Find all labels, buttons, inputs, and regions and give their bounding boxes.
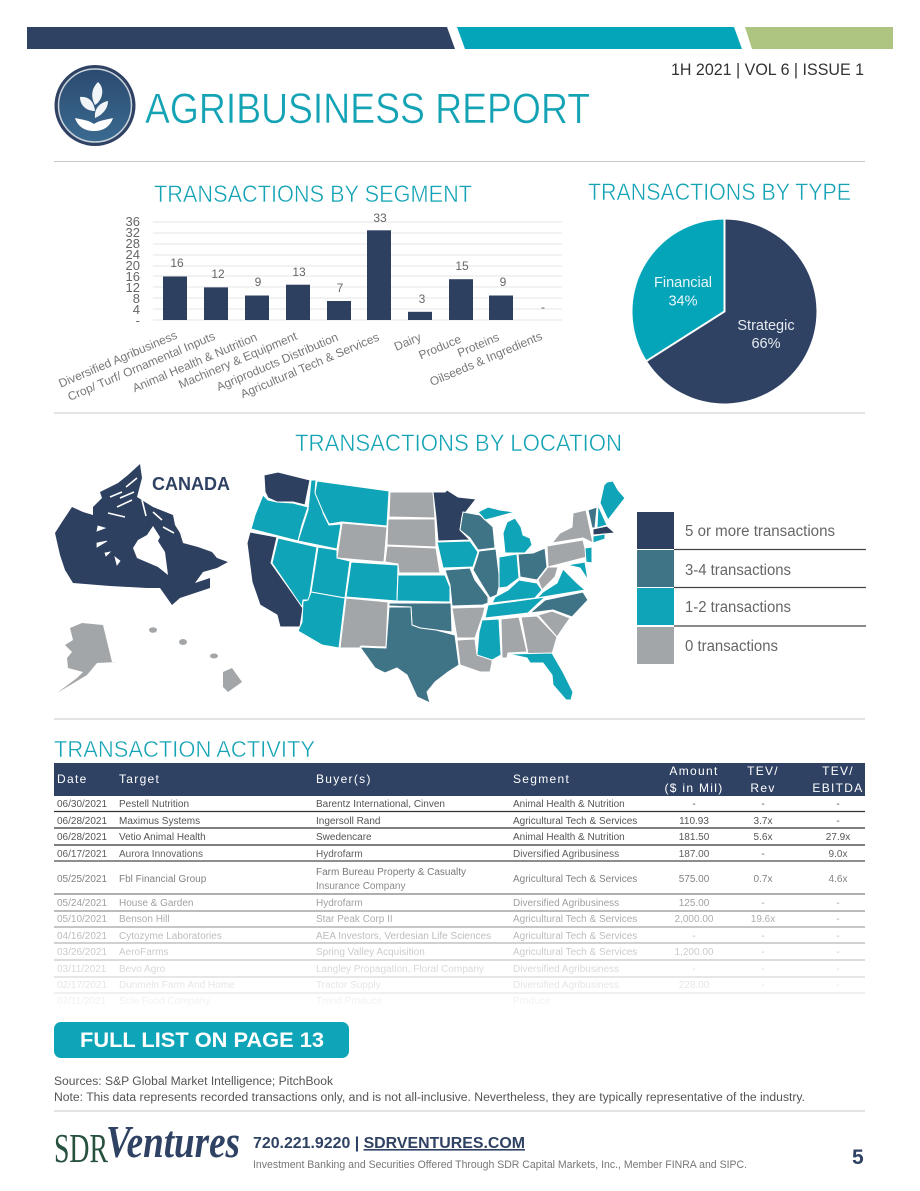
y axis labels: 24 (126, 247, 140, 262)
contact details (253, 1135, 747, 1171)
sources and note: Note: This data represents recorded transactions only, and is not all-inclusive. Nevertheless, they are typically representative of the industry. (54, 1092, 805, 1104)
contact details: Investment Banking and Securities Offered Through SDR Capital Markets, Inc., Member FINRA and SIPC. (253, 1159, 747, 1171)
table rows: 187.00 (679, 849, 710, 860)
table rows: Diversified Agribusiness (513, 964, 619, 975)
map: Alaska and Hawaii (57, 623, 242, 693)
category labels: Animal Health & Nutrition (130, 330, 259, 395)
table rows: Agricultural Tech & Services (513, 931, 637, 942)
bar value labels: 3 (419, 292, 426, 306)
table rows: - (692, 964, 696, 975)
table rows: 125.00 (679, 898, 710, 909)
table rows: 228.00 (679, 980, 710, 991)
table rows: Hydrofarm (316, 898, 363, 909)
category labels: Agriproducts Distribution (214, 330, 340, 394)
page number: 5 (852, 1146, 864, 1169)
table rows: Star Peak Corp II (316, 914, 393, 925)
bar value labels: 9 (500, 275, 507, 289)
table rows: Trend Produce (316, 996, 382, 1007)
bar value labels: - (541, 300, 545, 314)
table rows: 06/30/2021 (57, 799, 107, 810)
table rows: 06/28/2021 (57, 832, 107, 843)
table rows: - (761, 931, 765, 942)
table rows: 575.00 (679, 874, 710, 885)
SDR Ventures logo: Ventures (106, 1116, 240, 1167)
pie chart: transactions by type (632, 220, 816, 404)
table rows: 3.7x (754, 816, 772, 827)
table rows: Sole Food Company (119, 996, 210, 1007)
table rows: House & Garden (119, 898, 194, 909)
table rows: 06/17/2021 (57, 849, 107, 860)
table rows: - (692, 799, 696, 810)
table header: TEV/ (747, 764, 779, 778)
bar value labels: 13 (292, 265, 306, 279)
category labels: Proteins (455, 330, 501, 360)
table rows: Dunmeln Farm And Home (119, 980, 235, 991)
bar value labels: 15 (455, 259, 469, 273)
sources and note: Sources: S&P Global Market Intelligence; PitchBook (54, 1076, 333, 1088)
table rows: 4.6x (829, 874, 847, 885)
y axis labels: 8 (133, 291, 140, 306)
table rows: 110.93 (679, 816, 709, 827)
table header: Target (119, 772, 160, 786)
bars (163, 230, 513, 320)
pie label: financial: 34% (668, 294, 698, 310)
table rows: - (836, 914, 840, 925)
table rows: 05/25/2021 (57, 874, 107, 885)
table rows: - (761, 964, 765, 975)
y axis labels: 4 (133, 302, 140, 317)
map legend (637, 512, 866, 664)
table rows: Animal Health & Nutrition (513, 832, 625, 843)
table rows: 9.0x (829, 849, 847, 860)
bar value labels (170, 211, 545, 314)
pie label: strategic: Strategic (737, 318, 795, 334)
heading: transactions by type: TRANSACTIONS BY TYPE (588, 179, 851, 206)
table rows: Spring Valley Acquisition (316, 947, 425, 958)
legend labels (685, 523, 835, 655)
table rows: Benson Hill (119, 914, 170, 925)
heading: transactions by segment: TRANSACTIONS BY SEGMENT (154, 181, 472, 208)
y axis labels: - (136, 313, 140, 328)
y axis labels: 36 (126, 214, 140, 229)
table rows: Animal Health & Nutrition (513, 799, 625, 810)
table rows: 2,000.00 (675, 914, 714, 925)
category labels: Machinery & Equipment (176, 329, 300, 392)
table rows: Swedencare (316, 832, 372, 843)
icon: plant logo badge (54, 65, 136, 146)
bar value labels: 7 (337, 281, 344, 295)
bar value labels: 16 (170, 256, 184, 270)
table header (54, 763, 865, 796)
table rows: - (692, 931, 696, 942)
bar value labels: 12 (211, 267, 225, 281)
table rows: 03/11/2021 (57, 964, 107, 975)
table rows: - (836, 980, 840, 991)
button: full list on page 13 (54, 1022, 349, 1058)
table rows: - (836, 947, 840, 958)
table header: Date (57, 772, 88, 786)
category labels: Crop/ Turf/ Ornamental Inputs (66, 329, 217, 404)
table rows: 27.9x (826, 832, 850, 843)
table rows: - (836, 898, 840, 909)
table rows: Fbl Financial Group (119, 874, 207, 885)
table header: Buyer(s) (316, 772, 372, 786)
category labels: Agricultural Tech & Services (238, 330, 381, 401)
table header: ($ in Mil) (664, 781, 724, 795)
table rows: Tractor Supply (316, 980, 381, 991)
category labels: Produce (417, 332, 463, 362)
table rows: Agricultural Tech & Services (513, 914, 637, 925)
table rows: 02/11/2021 (57, 996, 107, 1007)
bar value labels: 9 (255, 275, 262, 289)
table rows: Produce (513, 996, 551, 1007)
table rows: Farm Bureau Property & Casualty (316, 867, 466, 878)
y axis labels: 32 (126, 225, 140, 240)
table rows: Hydrofarm (316, 849, 363, 860)
table rows: Langley Propagation, Floral Company (316, 964, 484, 975)
bar value labels: 33 (373, 211, 387, 225)
category labels: Diversified Agribusiness (56, 328, 179, 391)
legend labels: 1-2 transactions (685, 599, 791, 616)
table rows: 0.7x (754, 874, 772, 885)
table rows: Agricultural Tech & Services (513, 947, 637, 958)
table rows: - (836, 799, 840, 810)
table rows: Insurance Company (316, 881, 406, 892)
table rows: - (761, 980, 765, 991)
pie label: financial: Financial (654, 275, 712, 291)
button: full list on page 13: FULL LIST ON PAGE 13 (80, 1029, 324, 1052)
table rows: 06/28/2021 (57, 816, 107, 827)
y axis labels: 16 (126, 269, 140, 284)
table rows: AeroFarms (119, 947, 168, 958)
issue label: 1H 2021 | VOL 6 | ISSUE 1 (671, 61, 864, 79)
legend labels: 0 transactions (685, 638, 778, 655)
table header: Rev (750, 781, 776, 795)
table header: Segment (513, 772, 570, 786)
map: Canada (55, 464, 228, 605)
table header: EBITDA (812, 781, 864, 795)
table: transaction activity (50, 763, 870, 1014)
table rows: 04/16/2021 (57, 931, 107, 942)
sources and note (54, 1076, 805, 1104)
table rows: 05/10/2021 (57, 914, 107, 925)
table rows: Agricultural Tech & Services (513, 874, 637, 885)
table rows: - (836, 931, 840, 942)
table rows: - (761, 799, 765, 810)
legend swatches (637, 512, 674, 664)
legend labels: 5 or more transactions (685, 523, 835, 540)
table rows: - (761, 947, 765, 958)
map: United States by state (247, 472, 625, 703)
category labels: Dairy (392, 330, 423, 354)
y axis labels (126, 214, 140, 328)
table rows: 19.6x (751, 914, 775, 925)
category labels (56, 328, 544, 404)
table rows: Maximus Systems (119, 816, 200, 827)
table rows: - (836, 816, 840, 827)
pie label: strategic: 66% (751, 336, 781, 352)
table rows: 03/26/2021 (57, 947, 107, 958)
table rows: 02/17/2021 (57, 980, 107, 991)
heading: transactions by location: TRANSACTIONS BY LOCATION (295, 430, 622, 457)
table rows: 181.50 (679, 832, 710, 843)
table rows: Vetio Animal Health (119, 832, 206, 843)
contact details: 720.221.9220 | SDRVENTURES.COM (253, 1135, 525, 1152)
heading: transaction activity: TRANSACTION ACTIVITY (54, 736, 315, 762)
table rows: Barentz International, Cinven (316, 799, 445, 810)
table rows: 1,200.00 (675, 947, 714, 958)
table rows: Diversified Agribusiness (513, 849, 619, 860)
table rows: - (761, 849, 765, 860)
y axis labels: 28 (126, 236, 140, 251)
table rows: Ingersoll Rand (316, 816, 380, 827)
table rows: 5.6x (754, 832, 772, 843)
table row lines (54, 812, 865, 993)
table header: TEV/ (822, 764, 854, 778)
top colour banner (27, 27, 893, 49)
table rows: - (761, 898, 765, 909)
table rows: Cytozyme Laboratories (119, 931, 222, 942)
table rows: Bevo Agro (119, 964, 166, 975)
bar chart: transactions by segment (56, 211, 562, 404)
table rows: AEA Investors, Verdesian Life Sciences (316, 931, 491, 942)
table rows: Aurora Innovations (119, 849, 203, 860)
table rows: Diversified Agribusiness (513, 898, 619, 909)
SDR Ventures logo: SDR (54, 1125, 108, 1171)
table header: Amount (669, 764, 719, 778)
legend labels: 3-4 transactions (685, 562, 791, 579)
table rows: - (836, 964, 840, 975)
y axis labels: 12 (126, 280, 140, 295)
table rows (57, 799, 850, 1007)
table rows: 05/24/2021 (57, 898, 107, 909)
y axis labels: 20 (126, 258, 140, 273)
label: Canada: CANADA (152, 474, 230, 494)
category labels: Oilseeds & Ingredients (428, 329, 544, 389)
table rows: Pestell Nutrition (119, 799, 189, 810)
table rows: Diversified Agribusiness (513, 980, 619, 991)
table rows: Agricultural Tech & Services (513, 816, 637, 827)
title: AGRIBUSINESS REPORT (145, 85, 590, 133)
SDR Ventures logo (54, 1116, 240, 1171)
